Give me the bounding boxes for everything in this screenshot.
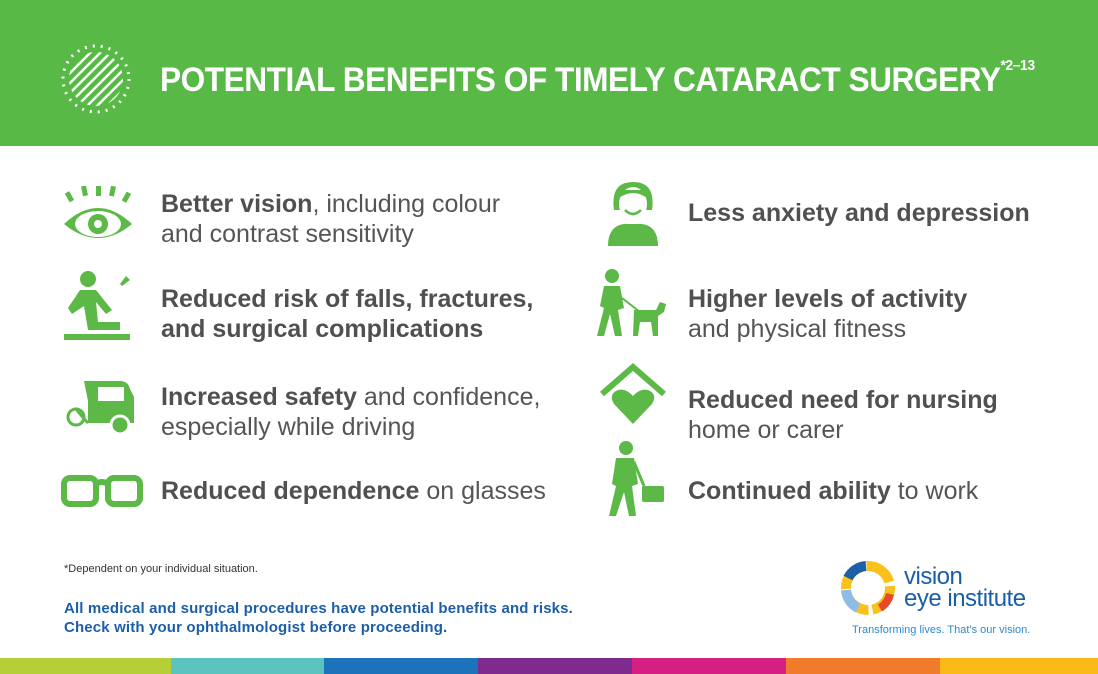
icon: worker with briefcase [609, 441, 664, 516]
text: nursing: Reduced need for nursing [688, 386, 998, 414]
text: nursing [688, 386, 998, 444]
colour bar [0, 658, 171, 674]
disclaimer [64, 600, 573, 636]
text: activity: and physical fitness [688, 315, 906, 343]
icon: lens [62, 44, 130, 114]
icon: glasses [61, 475, 143, 507]
icon: woman [608, 182, 658, 246]
text: activity: Higher levels of activity [688, 285, 967, 313]
text: activity [688, 285, 968, 343]
icon: walking dog [597, 269, 666, 336]
text: falls: Reduced risk of falls, fractures, [161, 285, 533, 313]
text: safety [161, 383, 540, 441]
logo text: vision [904, 563, 962, 590]
text: anxiety: Less anxiety and depression [688, 199, 1030, 227]
text: better vision: Better vision, including colour [161, 190, 500, 218]
icon: eye [64, 186, 132, 238]
text: nursing: home or carer [688, 416, 844, 444]
tagline: Transforming lives. That’s our vision. [852, 624, 1030, 636]
icon: car [66, 381, 134, 432]
logo text: eye institute [904, 585, 1026, 612]
text: falls: and surgical complications [161, 315, 483, 343]
text: better vision [161, 190, 500, 248]
text: falls [161, 285, 533, 343]
disclaimer: Check with your ophthalmologist before proceeding. [64, 619, 447, 636]
disclaimer: All medical and surgical procedures have potential benefits and risks. [64, 600, 573, 617]
text: better vision: and contrast sensitivity [161, 220, 414, 248]
icon: house heart [600, 363, 666, 424]
footnote: *Dependent on your individual situation. [64, 563, 258, 575]
header band [0, 0, 1098, 146]
logo [841, 561, 1030, 636]
text: work: Continued ability to work [688, 477, 978, 505]
text: safety: Increased safety and confidence, [161, 383, 540, 411]
title: POTENTIAL BENEFITS OF TIMELY CATARACT SURGERY*2–13 [160, 57, 1035, 99]
text: glasses: Reduced dependence on glasses [161, 477, 546, 505]
icon: fall [64, 271, 130, 340]
logo mark [841, 561, 895, 615]
text: safety: especially while driving [161, 413, 415, 441]
logo text [904, 563, 1026, 612]
